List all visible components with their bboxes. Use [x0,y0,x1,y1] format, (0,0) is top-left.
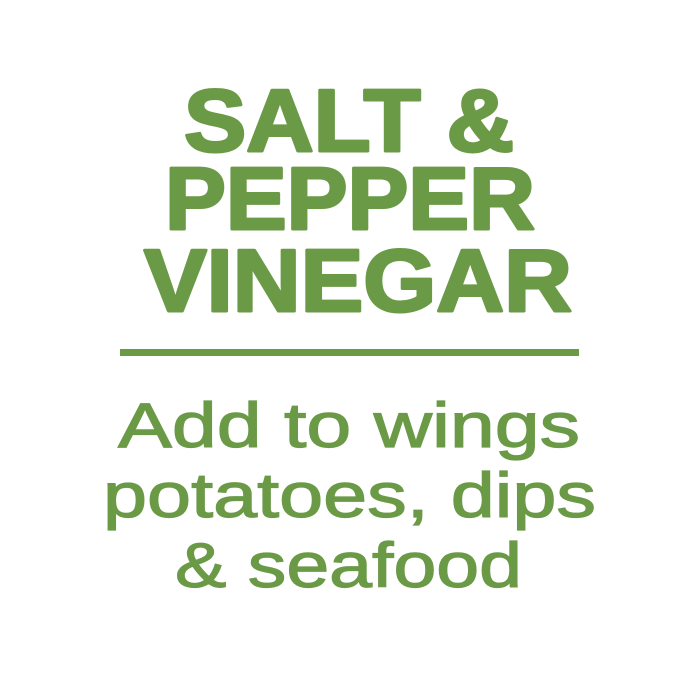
title: VINEGAR [144,231,572,330]
title: SALT & [184,71,514,170]
subtitle text: potatoes, dips [103,461,596,531]
divider rule [120,349,579,356]
title: PEPPER [165,149,535,248]
subtitle text: & seafood [175,531,522,601]
title [144,71,572,330]
subtitle text: Add to wings [118,391,580,461]
subtitle text [103,391,596,601]
